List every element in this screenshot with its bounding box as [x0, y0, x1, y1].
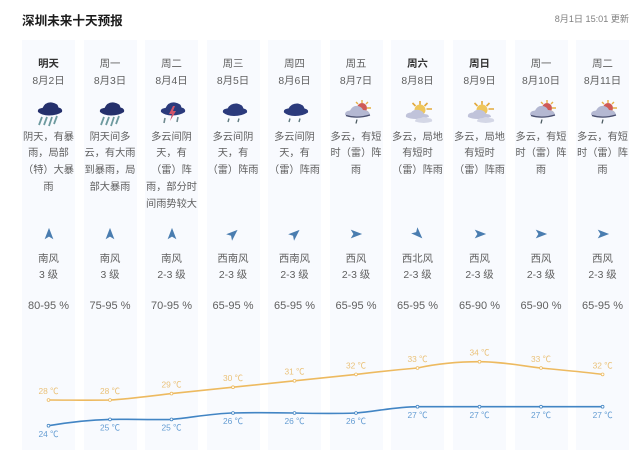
day label: 周四 — [284, 59, 305, 70]
icon: wind direction — [168, 228, 176, 240]
day label: 周一 — [100, 59, 120, 70]
icon: wind direction — [411, 227, 422, 238]
icon: sun behind rain cloud — [591, 100, 617, 124]
wind level: 2-3 级 — [157, 270, 186, 281]
wind level: 2-3 级 — [342, 270, 370, 281]
wind direction text: 西南风 — [279, 254, 310, 265]
high temperature line: 30 ℃ — [223, 373, 244, 383]
wind level: 2-3 级 — [219, 270, 247, 281]
day label: 周日 — [469, 59, 490, 70]
update time: 8月1日 15:01 更新 — [555, 14, 629, 24]
weather description — [516, 131, 566, 176]
wind direction text: 南风 — [38, 254, 59, 265]
date: 8月10日 — [522, 76, 560, 86]
icon: wind direction — [598, 230, 609, 238]
day label: 周三 — [223, 59, 243, 70]
high temperature line: 28 ℃ — [100, 386, 121, 396]
panel: day 9 forecast — [514, 40, 568, 450]
humidity: 75-95 % — [90, 300, 130, 312]
icon: wind direction — [288, 230, 300, 241]
date: 8月11日 — [584, 76, 621, 86]
weather description: 天，有 — [218, 148, 248, 159]
icon: wind direction — [350, 230, 362, 238]
icon: wind direction — [536, 230, 547, 238]
weather description — [208, 131, 258, 176]
weather description: （特）大暴 — [23, 165, 74, 176]
weather description: 阴天间多 — [90, 132, 130, 142]
date: 8月3日 — [94, 76, 126, 86]
panel: day 1 forecast — [22, 40, 75, 450]
low temperature line: 27 ℃ — [469, 410, 490, 420]
weather description: 天，有 — [279, 148, 310, 159]
panel: day 8 forecast — [453, 40, 506, 450]
wind direction text: 西风 — [346, 254, 366, 265]
high temperature line: 33 ℃ — [407, 354, 428, 364]
weather description — [392, 131, 443, 176]
low temperature line: 25 ℃ — [100, 422, 121, 432]
date: 8月8日 — [401, 76, 434, 86]
weather description: 多云间阴 — [213, 132, 253, 142]
weather description: 时（雷）阵 — [577, 148, 628, 159]
wind direction text: 西风 — [592, 254, 613, 265]
icon: wind direction — [474, 230, 486, 238]
panel: day 10 forecast — [576, 40, 629, 450]
day label: 周五 — [346, 59, 366, 70]
high temperature line: 32 ℃ — [593, 360, 613, 370]
wind level: 3 级 — [39, 270, 58, 281]
panel: day 7 forecast — [391, 40, 444, 450]
humidity: 70-95 % — [151, 300, 192, 312]
humidity: 65-95 % — [582, 300, 623, 312]
weather description — [331, 131, 382, 176]
low temperature line — [38, 405, 613, 439]
weather description: 天，有 — [156, 148, 187, 159]
day label: 周一 — [531, 59, 551, 70]
title: 深圳未来十天预报 — [22, 14, 123, 28]
date: 8月5日 — [217, 76, 249, 86]
icon: wind direction — [106, 228, 114, 240]
humidity: 80-95 % — [28, 300, 69, 312]
weather description: 多云，有短 — [331, 132, 381, 142]
icon: sun behind rain cloud — [345, 100, 371, 124]
weather description: 云，有大雨 — [85, 148, 135, 159]
low temperature line: 26 ℃ — [223, 416, 244, 426]
icon: wind direction — [226, 230, 238, 241]
weather description: （雷）阵雨 — [454, 165, 505, 176]
wind level: 2-3 级 — [403, 270, 432, 281]
wind level: 3 级 — [100, 270, 120, 281]
icon: sun behind rain cloud — [530, 100, 556, 124]
weather description: 有短时 — [402, 148, 433, 159]
icon: heavy rain — [38, 102, 62, 126]
wind direction text: 西南风 — [217, 254, 249, 265]
weather description: （雷）阵雨 — [208, 165, 258, 176]
date: 8月9日 — [463, 76, 496, 86]
wind level: 2-3 级 — [527, 270, 555, 281]
low temperature line: 26 ℃ — [346, 416, 367, 426]
low temperature line: 26 ℃ — [284, 416, 305, 426]
date: 8月2日 — [32, 76, 65, 86]
weather description: 多云，有短 — [577, 132, 628, 142]
panel: day 4 forecast — [206, 40, 260, 450]
weather description: 雨 — [536, 165, 546, 176]
wind direction text: 南风 — [161, 254, 182, 265]
humidity: 65-95 % — [212, 300, 253, 312]
icon: heavy rain — [100, 102, 124, 126]
weather description: 雨 — [43, 182, 54, 193]
icon: sun behind clouds — [406, 101, 432, 123]
panel: day 6 forecast — [330, 40, 382, 450]
weather description — [23, 131, 74, 193]
high temperature line: 33 ℃ — [531, 354, 552, 364]
weather description: 阴天，有暴 — [23, 132, 74, 142]
weather description: 到暴雨，局 — [85, 165, 135, 176]
weather description: 间雨势较大 — [146, 199, 197, 210]
wind level: 2-3 级 — [280, 270, 309, 281]
high temperature line — [38, 348, 613, 401]
day label: 周二 — [161, 59, 182, 70]
weather description: （雷）阵 — [151, 165, 192, 176]
weather description — [85, 131, 135, 193]
humidity: 65-90 % — [520, 300, 561, 312]
weather description: 多云间阴 — [151, 132, 192, 142]
weather description — [269, 131, 320, 176]
high temperature line: 28 ℃ — [38, 386, 59, 396]
day label: 周二 — [592, 59, 613, 70]
weather description: 时（雷）阵 — [331, 148, 381, 159]
panel: day 5 forecast — [268, 40, 321, 450]
day label: 明天 — [38, 59, 59, 70]
low temperature line: 27 ℃ — [593, 410, 613, 420]
low temperature line: 25 ℃ — [161, 422, 182, 432]
weather description: 多云，有短 — [516, 132, 566, 142]
weather description — [577, 131, 628, 176]
high temperature line: 34 ℃ — [469, 348, 490, 358]
panel: day 3 forecast — [145, 40, 198, 450]
wind direction text: 南风 — [100, 254, 120, 265]
icon: thunderstorm — [160, 102, 186, 124]
icon: wind direction — [44, 228, 54, 240]
humidity: 65-95 % — [336, 300, 376, 312]
weather description — [454, 131, 505, 176]
weather description: 多云，局地 — [454, 132, 505, 142]
weather description: （雷）阵雨 — [392, 165, 443, 176]
humidity: 65-95 % — [397, 300, 438, 312]
low temperature line: 27 ℃ — [531, 410, 552, 420]
panel: day 2 forecast — [84, 40, 136, 450]
high temperature line: 32 ℃ — [346, 360, 367, 370]
weather description: 时（雷）阵 — [516, 148, 566, 159]
weather description: 雨，局部 — [28, 148, 69, 159]
icon: showers — [222, 104, 248, 122]
weather description: 部大暴雨 — [90, 182, 130, 193]
low temperature line: 27 ℃ — [407, 410, 428, 420]
wind direction text: 西风 — [531, 254, 551, 265]
weather description: 多云间阴 — [274, 132, 315, 142]
date: 8月4日 — [155, 76, 188, 86]
weather description: 雨，部分时 — [146, 182, 197, 193]
wind level: 2-3 级 — [465, 270, 494, 281]
low temperature line: 24 ℃ — [38, 429, 59, 439]
day label: 周六 — [407, 59, 428, 70]
high temperature line: 29 ℃ — [161, 380, 182, 390]
weather description — [146, 131, 197, 210]
weather description: 有短时 — [464, 148, 495, 159]
humidity: 65-95 % — [274, 300, 315, 312]
date: 8月6日 — [278, 76, 311, 86]
icon: sun behind clouds — [468, 101, 494, 123]
wind direction text: 西北风 — [402, 254, 433, 265]
wind level: 2-3 级 — [588, 270, 617, 281]
high temperature line: 31 ℃ — [284, 366, 305, 376]
weather description: 雨 — [351, 165, 361, 176]
weather description: 雨 — [597, 165, 608, 176]
humidity: 65-90 % — [459, 300, 500, 312]
wind direction text: 西风 — [469, 254, 490, 265]
date: 8月7日 — [340, 76, 372, 86]
weather description: 多云，局地 — [392, 132, 443, 142]
weather description: （雷）阵雨 — [269, 165, 320, 176]
icon: showers — [284, 104, 308, 122]
